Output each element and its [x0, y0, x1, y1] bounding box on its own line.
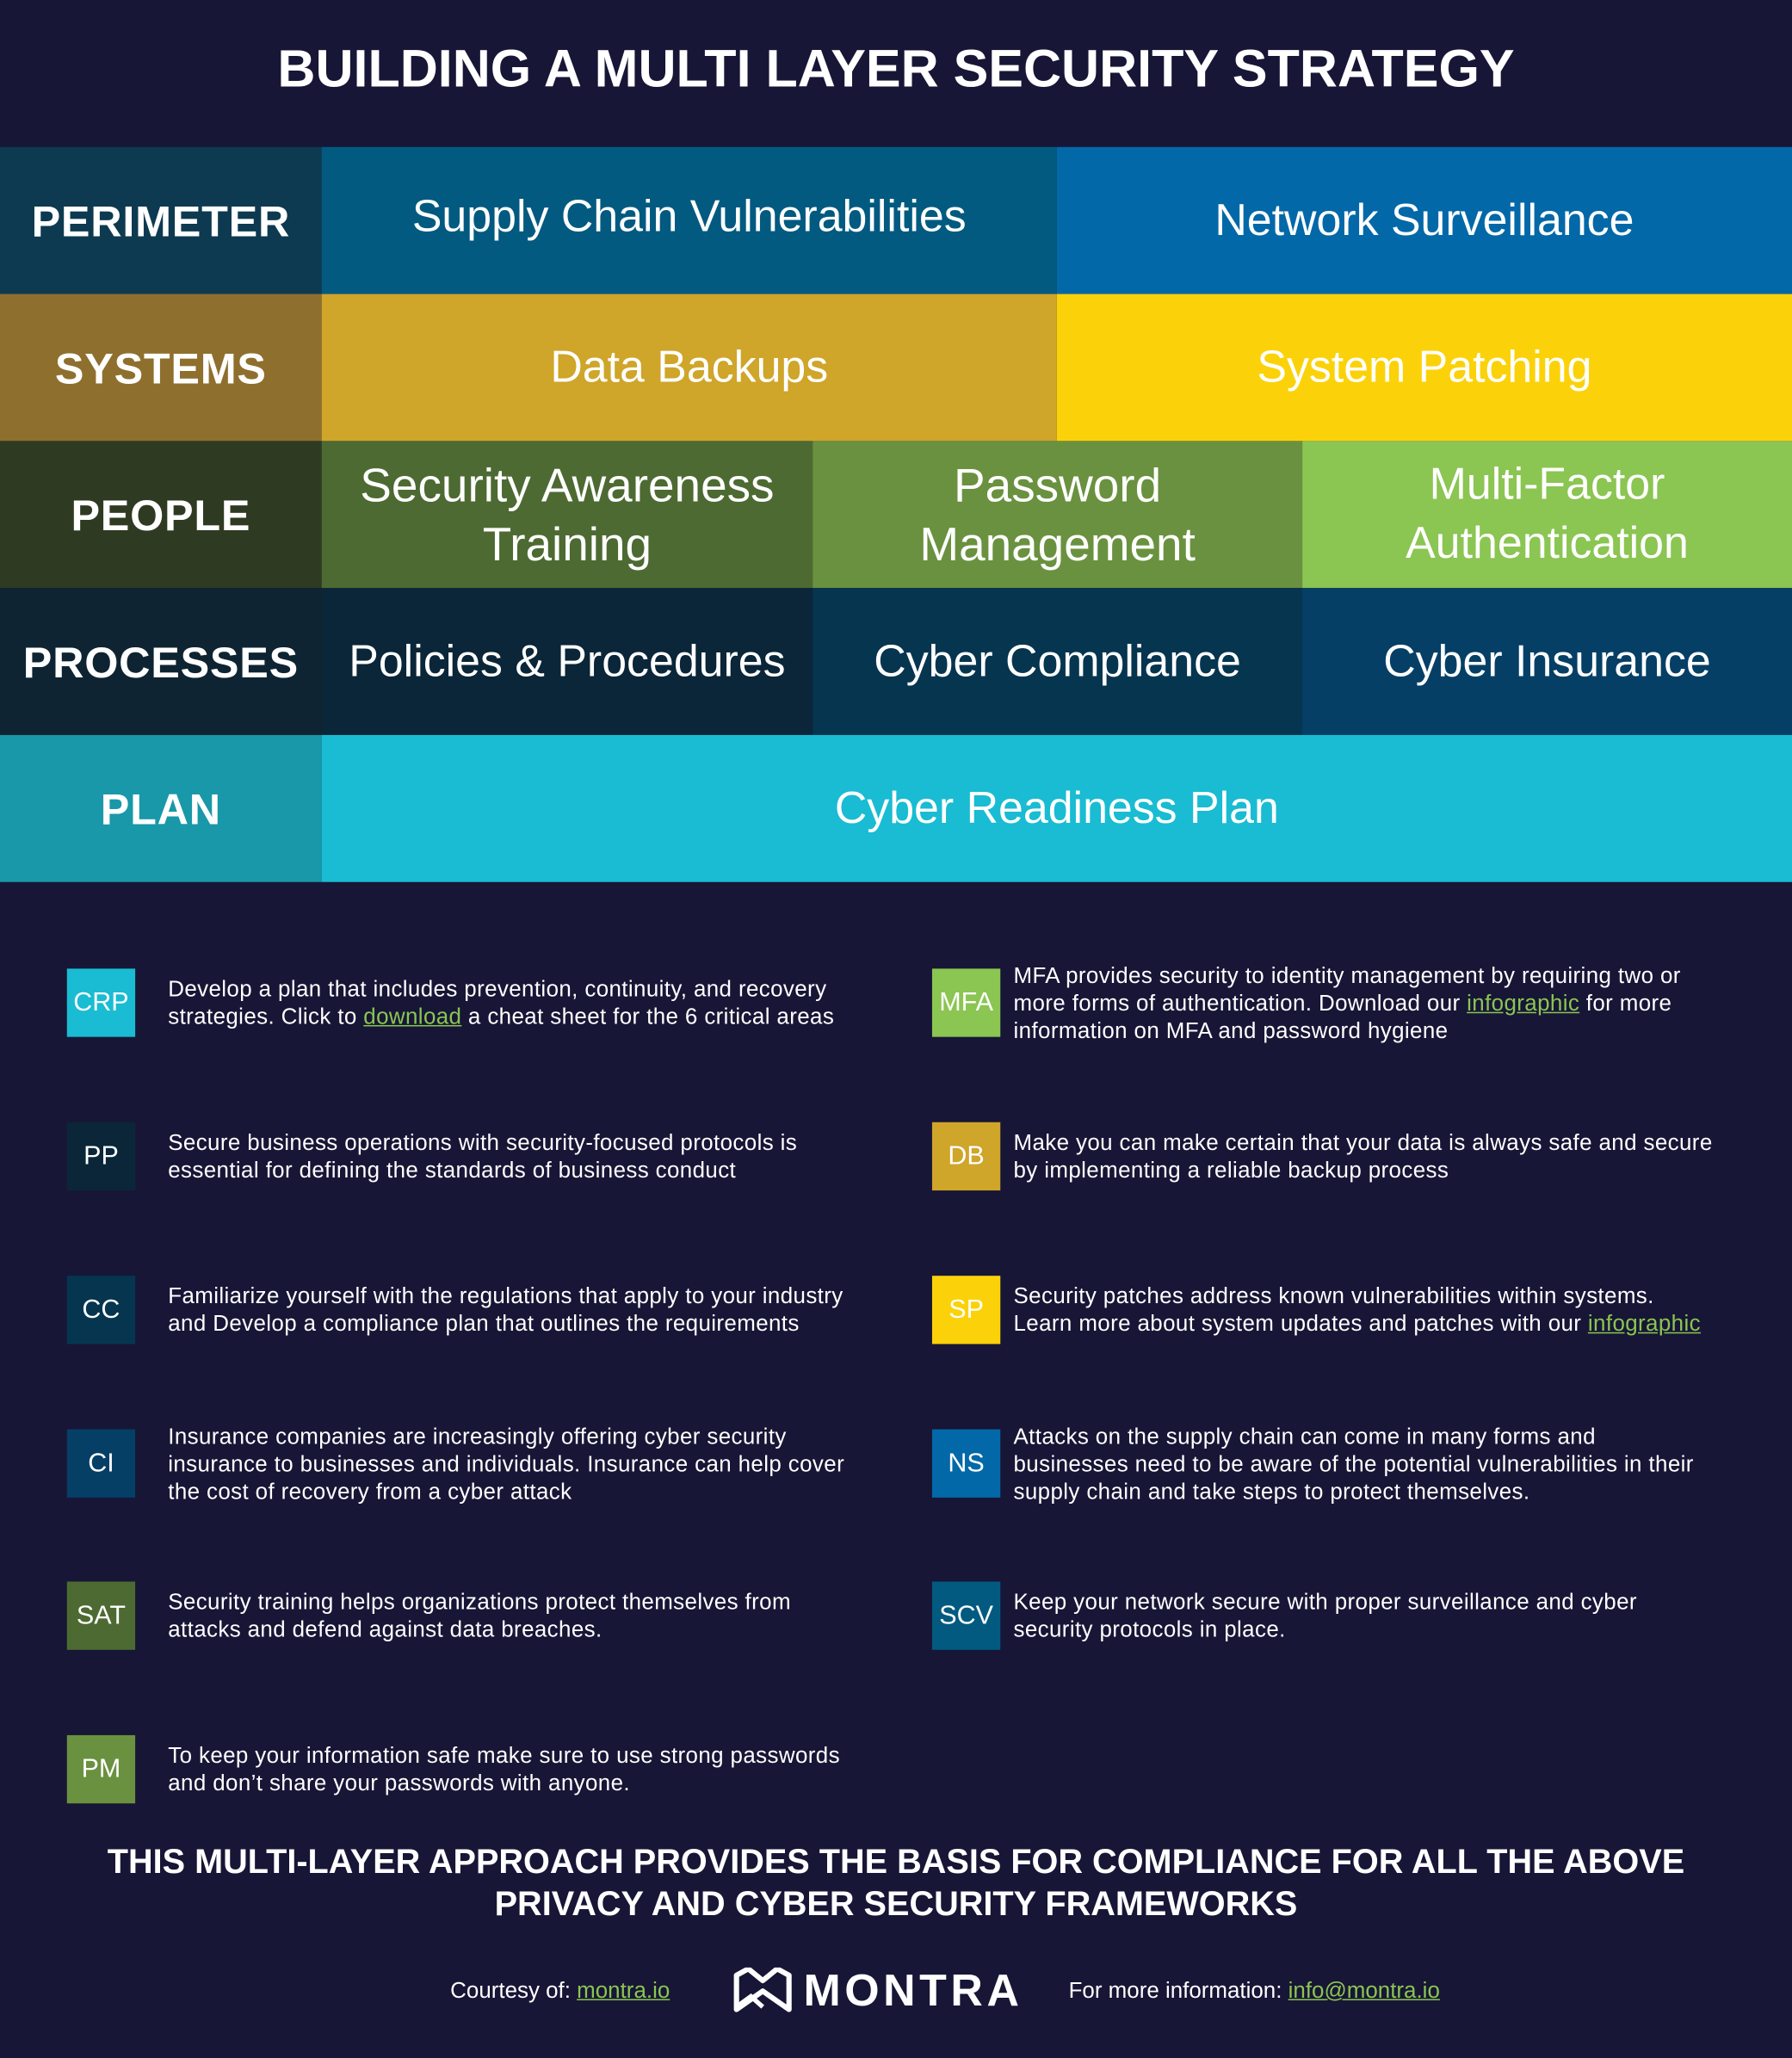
legend: SP: SP	[949, 1295, 984, 1324]
legend: CRP: CRP	[73, 987, 129, 1017]
row: people: Training	[483, 517, 652, 571]
row: people: Security Awareness	[360, 458, 775, 512]
row: people: Password	[954, 458, 1161, 512]
legend: SAT: Security training helps organizations protect themselves from attacks and defend against data breaches.	[168, 1590, 791, 1642]
row: perimeter: Network Surveillance	[1214, 195, 1634, 244]
legend: CC: Familiarize yourself with the regulations that apply to your industry and Develop a compliance plan that outlines the requirements	[168, 1283, 843, 1336]
row: people: Management	[919, 517, 1196, 571]
legend: PM: To keep your information safe make sure to use strong passwords and don’t share your passwords with anyone.	[168, 1743, 840, 1795]
legend: NS: NS	[948, 1449, 985, 1477]
row: plan: Cyber Readiness Plan	[835, 783, 1279, 833]
legend: MFA: MFA	[939, 987, 993, 1017]
row: people: Authentication	[1406, 518, 1689, 568]
legend: SCV: Keep your network secure with proper surveillance and cyber security protocols in place.	[1014, 1590, 1637, 1642]
footer heading	[108, 1841, 1684, 1923]
legend: SP	[931, 1276, 1701, 1344]
legend: PP	[67, 1122, 797, 1190]
legend: SCV	[932, 1582, 1637, 1650]
legend: SP: Security patches address known vulnerabilities within systems. Learn more about system updates and patches with our infographic	[1014, 1283, 1701, 1336]
legend: PP: PP	[83, 1141, 119, 1170]
row: plan: PLAN	[101, 784, 221, 833]
row: systems: SYSTEMS	[55, 343, 267, 392]
row: systems	[0, 294, 1792, 441]
row: plan	[0, 735, 1792, 882]
title: BUILDING A MULTI LAYER SECURITY STRATEGY	[277, 40, 1515, 98]
footer: courtesy: Courtesy of: montra.io	[450, 1978, 670, 2003]
row: processes: Cyber Compliance	[874, 636, 1241, 686]
row: people	[0, 441, 1792, 589]
row: processes: Policies & Procedures	[349, 636, 786, 686]
legend: MFA: MFA provides security to identity management by requiring two or more forms of authentication. Download our infographic for more information on MFA and password hygiene	[1014, 963, 1681, 1043]
legend: CC: CC	[82, 1295, 120, 1324]
row: perimeter: Supply Chain Vulnerabilities	[412, 191, 967, 241]
legend: CI: CI	[88, 1449, 114, 1477]
legend: DB: DB	[948, 1141, 985, 1170]
legend: SAT: SAT	[77, 1601, 126, 1629]
legend: DB	[931, 1122, 1713, 1191]
footer: contact: For more information: info@montra.io	[1069, 1978, 1440, 2003]
legend: PM: PM	[82, 1754, 120, 1783]
legend: CC	[67, 1276, 843, 1344]
legend: NS: Attacks on the supply chain can come in many forms and businesses need to be aware of the potential vulnerabilities in their supply chain and take steps to protect themselves.	[1014, 1424, 1694, 1504]
footer heading: THIS MULTI-LAYER APPROACH PROVIDES THE BASIS FOR COMPLIANCE FOR ALL THE ABOVE	[108, 1841, 1684, 1881]
row: people: PEOPLE	[71, 491, 250, 539]
legend: DB: Make you can make certain that your data is always safe and secure by implementing a reliable backup process	[1014, 1130, 1713, 1183]
logo: montra: MONTRA	[803, 1966, 1023, 2016]
row: people: Multi-Factor	[1430, 460, 1665, 510]
legend: PP: Secure business operations with security-focused protocols is essential for defining the standards of business conduct	[168, 1130, 797, 1183]
legend: SCV: SCV	[939, 1601, 993, 1629]
row: systems: System Patching	[1257, 342, 1591, 392]
legend: CRP	[67, 968, 834, 1037]
row: processes: PROCESSES	[23, 637, 299, 686]
legend: SAT	[67, 1582, 791, 1650]
row: perimeter: PERIMETER	[32, 196, 290, 244]
footer heading: PRIVACY AND CYBER SECURITY FRAMEWORKS	[495, 1883, 1297, 1923]
legend: CRP: Develop a plan that includes prevention, continuity, and recovery strategies. Click to download a cheat sheet for the 6 critical areas	[168, 977, 834, 1029]
row: perimeter	[0, 146, 1792, 294]
row: processes	[0, 588, 1792, 735]
row: systems: Data Backups	[550, 342, 828, 392]
legend: PM	[67, 1735, 840, 1804]
row: processes: Cyber Insurance	[1383, 636, 1711, 686]
legend: CI: Insurance companies are increasingly offering cyber security insurance to businesses and individuals. Insurance can help cover the cost of recovery from a cyber attack	[168, 1424, 844, 1504]
